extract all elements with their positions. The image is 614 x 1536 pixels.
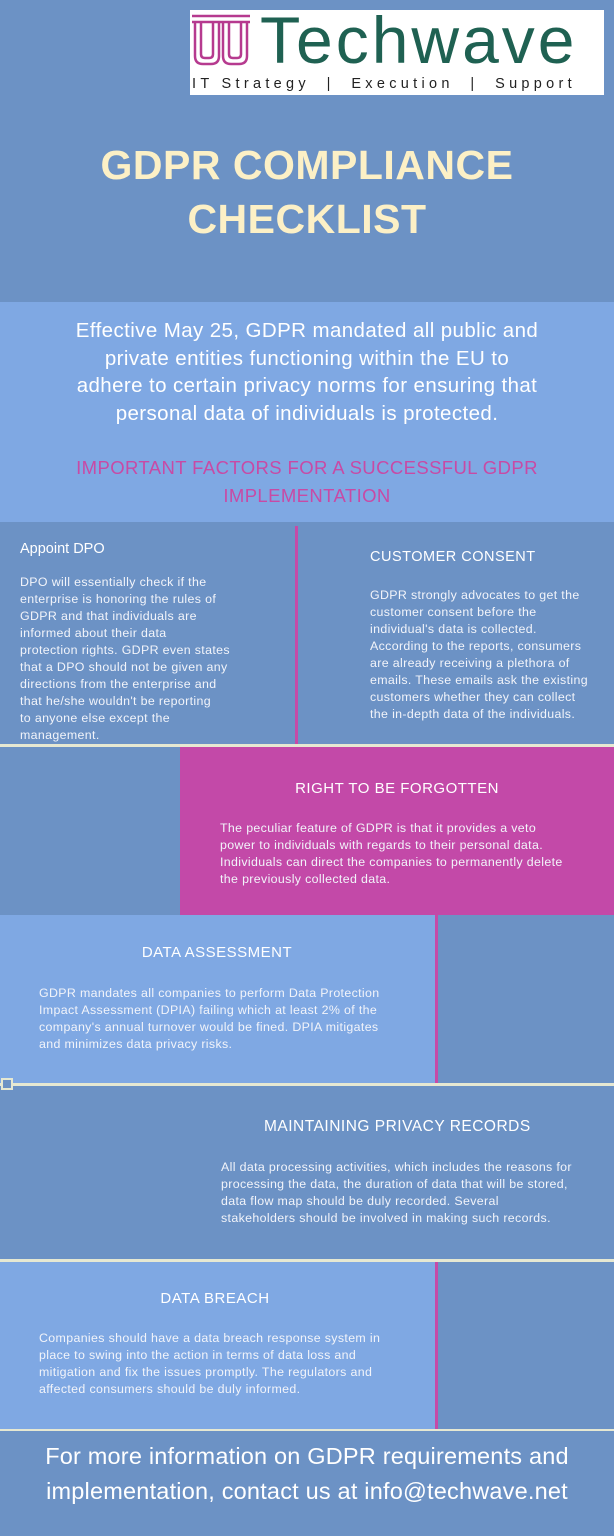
- panel: data assessment: company's annual turnover would be fined. DPIA mitigates: [39, 1020, 378, 1034]
- panel: maintaining privacy records: [221, 1118, 572, 1225]
- panel: customer consent: emails. These emails ask the existing: [370, 673, 588, 687]
- logo: [190, 10, 604, 95]
- panel: appoint DPO: enterprise is honoring the rules of: [20, 592, 216, 606]
- panel: customer consent: GDPR strongly advocates to get the: [370, 588, 580, 602]
- panel: customer consent: are already receiving a plethora of: [370, 656, 570, 670]
- panel: data assessment: [0, 915, 436, 1084]
- panel: appoint DPO: to anyone else except the: [20, 711, 170, 725]
- panel: right to be forgotten: [180, 747, 614, 915]
- subheading: [76, 457, 538, 506]
- panel: maintaining privacy records: MAINTAINING PRIVACY RECORDS: [264, 1118, 531, 1135]
- panel: right to be forgotten: RIGHT TO BE FORGOTTEN: [295, 780, 499, 797]
- icon: small square: [1, 1078, 13, 1090]
- panel: appoint DPO: that a DPO should not be given any: [20, 660, 228, 674]
- panel: data assessment: GDPR mandates all companies to perform Data Protection: [39, 986, 380, 1000]
- panel: appoint DPO: directions from the enterprise and: [20, 677, 216, 691]
- panel: right to be forgotten: the previously collected data.: [220, 872, 390, 886]
- footer: [45, 1443, 569, 1504]
- panel: maintaining privacy records: stakeholders should be involved in making such records.: [221, 1211, 551, 1225]
- panel: maintaining privacy records: All data processing activities, which includes the reasons for: [221, 1160, 572, 1174]
- icon: logo mark: [192, 14, 250, 66]
- footer: For more information on GDPR requirements and: [45, 1443, 569, 1469]
- panel: appoint DPO: informed about their data: [20, 626, 167, 640]
- panel: customer consent: [370, 549, 588, 721]
- intro text: private entities functioning within the EU to: [105, 346, 509, 370]
- panel: customer consent: individual's data is collected.: [370, 622, 537, 636]
- panel: appoint DPO: that he/she wouldn't be reporting: [20, 694, 211, 708]
- panel: maintaining privacy records: processing the data, the duration of data that will be stored,: [221, 1177, 568, 1191]
- panel: data breach: Companies should have a data breach response system in: [39, 1331, 380, 1345]
- panel: appoint DPO: GDPR and that individuals are: [20, 609, 197, 623]
- panel: data breach: DATA BREACH: [160, 1290, 270, 1307]
- panel: data breach: [0, 1262, 436, 1430]
- panel: appoint DPO: Appoint DPO: [20, 541, 105, 557]
- panel: right to be forgotten: Individuals can direct the companies to permanently delete: [220, 855, 563, 869]
- panel: data assessment: Impact Assessment (DPIA) failing which at least 2% of the: [39, 1003, 377, 1017]
- panel: data breach: affected consumers should be duly informed.: [39, 1382, 300, 1396]
- subheading: IMPLEMENTATION: [223, 485, 391, 506]
- panel: appoint DPO: protection rights. GDPR even states: [20, 643, 230, 657]
- panel: data assessment: DATA ASSESSMENT: [142, 944, 292, 961]
- panel: customer consent: customer consent before the: [370, 605, 536, 619]
- panel: customer consent: customers whether they can collect: [370, 690, 575, 704]
- panel: right to be forgotten: power to individuals with regards to their personal data.: [220, 838, 543, 852]
- panel: data breach: place to swing into the action in terms of data loss and: [39, 1348, 356, 1362]
- panel: appoint DPO: management.: [20, 728, 100, 742]
- panel: customer consent: CUSTOMER CONSENT: [370, 549, 536, 565]
- panel: data assessment: and minimizes data privacy risks.: [39, 1037, 232, 1051]
- panel: appoint DPO: [20, 541, 230, 742]
- tagline: IT Strategy | Execution | Support: [192, 76, 576, 92]
- title: GDPR COMPLIANCE: [101, 142, 513, 188]
- title: CHECKLIST: [187, 196, 427, 242]
- subheading: IMPORTANT FACTORS FOR A SUCCESSFUL GDPR: [76, 457, 538, 478]
- intro text: [76, 319, 538, 424]
- panel: data breach: mitigation and fix the issues promptly. The regulators and: [39, 1365, 372, 1379]
- panel: customer consent: the in-depth data of the individuals.: [370, 707, 575, 721]
- intro text: personal data of individuals is protected.: [116, 402, 498, 424]
- intro text: adhere to certain privacy norms for ensuring that: [77, 374, 537, 397]
- intro text: Effective May 25, GDPR mandated all public and: [76, 319, 538, 342]
- panel: appoint DPO: DPO will essentially check if the: [20, 575, 206, 589]
- panel: customer consent: According to the reports, consumers: [370, 639, 581, 653]
- title: [101, 142, 513, 242]
- footer: implementation, contact us at info@techwave.net: [46, 1478, 568, 1504]
- panel: maintaining privacy records: data flow map should be duly recorded. Several: [221, 1194, 499, 1208]
- panel: right to be forgotten: The peculiar feature of GDPR is that it provides a veto: [220, 821, 536, 835]
- intro band: [0, 302, 614, 522]
